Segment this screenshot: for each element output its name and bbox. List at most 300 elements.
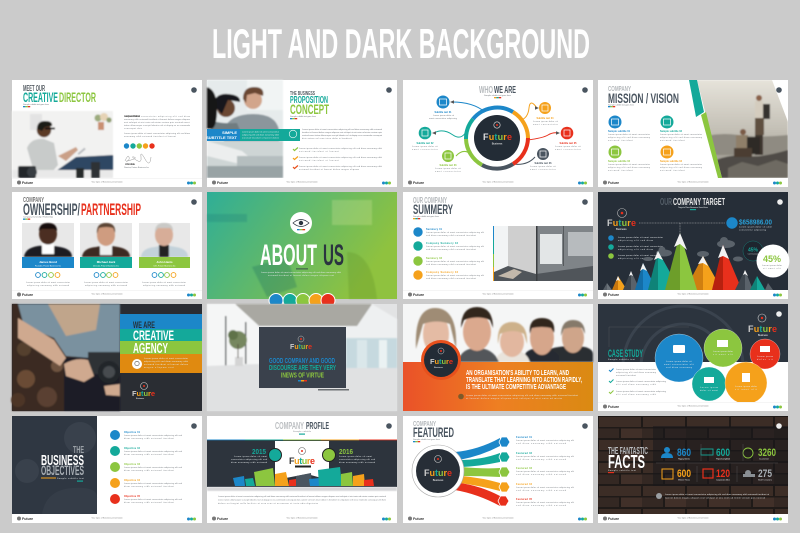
heading: THE [73, 445, 84, 456]
footer [598, 178, 788, 187]
objectives list: Objective 03 [124, 463, 141, 466]
objectives list: diam nonummy nibh euismod tincidunt [124, 469, 174, 472]
panel: company target [598, 192, 790, 299]
stat: 600 teal: 600 [716, 447, 730, 459]
logo [748, 314, 777, 337]
heading: FACTS [608, 452, 645, 472]
heading: PROFILE [306, 421, 329, 432]
color dots [269, 294, 335, 308]
stat: white 45 percent: 45% [763, 254, 781, 264]
footer [207, 514, 397, 523]
footer: Your topic of Business presentation [91, 516, 123, 520]
color bands [120, 314, 202, 373]
panel: ownership partnership [12, 192, 202, 299]
dark gauge header [598, 304, 788, 362]
feature labels: sed diam nonummy nibh euismod [516, 443, 567, 445]
heading: Sample subtitle [293, 430, 312, 433]
node labels: Subtitle text 02 [416, 142, 434, 145]
footer: Future [22, 517, 33, 521]
ribbon end badges [498, 437, 510, 506]
signature: Director, Future Business Inc [124, 166, 150, 169]
icon: badge [777, 199, 783, 205]
four mission items: Lorem ipsum dolor sit amet consectetur [608, 163, 650, 166]
footer: Future [217, 181, 228, 185]
checklist: Lorem ipsum dolor sit amet consectetur adipiscing elit sed diam nonummy nibh [299, 165, 383, 168]
footer: Future [413, 293, 424, 297]
subtitle band: euismod tincidunt ut laoreet dolore [242, 136, 280, 140]
stat: 3260: 3260 [758, 447, 776, 459]
icon: badge [776, 423, 782, 429]
heading [660, 197, 725, 210]
amount [726, 217, 772, 232]
card: James Bond: Founder, Future Business Inc [35, 264, 61, 268]
node labels: Lorem ipsum dolor sit [433, 114, 454, 117]
subtitle band [206, 129, 300, 141]
body text [124, 115, 191, 138]
footer: Your topic of Business presentation [677, 180, 709, 184]
accent stripes [689, 80, 722, 178]
summary items: sed diam nonummy nibh euismod tincidunt [426, 248, 476, 251]
four mission items: Sample subtitle 04 [660, 160, 683, 163]
body text: nonummy nibh euismod tincidunt ut laoreet dolore magna aliquam [124, 118, 190, 121]
caption [656, 493, 769, 500]
bubble icons and text: Lorem ipsum dolor [735, 385, 757, 388]
checklist: euismod tincidunt ut laoreet [299, 150, 339, 153]
subtitle band: adipiscing elit sed diam nonummy nibh [242, 134, 280, 136]
node labels: Lorem ipsum dolor sit [435, 167, 461, 170]
caption: ut laoreet dolore magna aliquam erat volutpat ut wisi enim ad minim [466, 397, 562, 400]
stat: 275: Staff Creators [758, 478, 773, 482]
logo badge [421, 340, 461, 380]
heading: BUSINESS [41, 452, 84, 469]
heading: FEATURED [413, 424, 454, 440]
ribbons [455, 438, 500, 506]
heading: WHO [479, 85, 493, 96]
node labels: Subtitle text 04 [536, 117, 554, 120]
card: Michael Jack [80, 223, 132, 268]
stat: 3260: Customer [759, 458, 769, 460]
arrows [432, 100, 560, 164]
footer: Your topic of Business presentation [91, 180, 123, 184]
heading: COMPANY [275, 421, 304, 432]
stat: 120: 120 [716, 468, 730, 480]
objectives list: Objective 01 [124, 431, 141, 434]
heading [413, 196, 453, 219]
footer: Your topic of Business presentation [286, 516, 318, 520]
signature: John Hanis [125, 163, 136, 166]
objectives list: Objective 02 [124, 447, 141, 450]
checklist: Lorem ipsum dolor sit amet consectetur adipiscing [616, 390, 667, 393]
timeline 2015 [231, 448, 282, 464]
four mission items: adipiscing elit sed diam nonummy [660, 166, 703, 169]
node labels: Subtitle text 03 [439, 164, 457, 167]
stat: 600 orange: Winner Years [678, 478, 691, 482]
stat: 600 orange: 600 [677, 468, 691, 480]
timeline 2015: diam nonummy nibh euismod [231, 462, 268, 464]
footer: Future [22, 181, 33, 185]
ring diagram: Future [483, 132, 512, 142]
panel: who we are [403, 80, 593, 187]
contact icons and text: Lorem ipsum dolor sit amet consectetur [84, 281, 128, 284]
ring diagram: Business [492, 142, 503, 146]
body text: Lorem ipsum dolor sit amet consectetur adipiscing elit sed diam [124, 132, 190, 135]
footer: Your topic of Business presentation [482, 292, 514, 296]
amount: Lorem ipsum dolor sit amet [739, 226, 772, 228]
heading: OUR COMPANY [413, 196, 447, 205]
subtitle band: Lorem ipsum dolor sit amet consectetur [242, 130, 279, 134]
heading: Sample subtitle text goes here [484, 94, 512, 97]
heading: AGENCY [133, 341, 168, 357]
footer [598, 290, 788, 299]
quote box: DISCOURSE ARE THEY VERY [269, 365, 336, 372]
heading: Sample subtitle text [57, 477, 84, 480]
feature labels: Featured 03 [516, 467, 533, 470]
objectives list [110, 430, 183, 504]
summary items: Company Summery 04 [426, 271, 459, 274]
checklist [293, 147, 383, 171]
footer: Your topic of Business presentation [677, 404, 709, 408]
stat: white 45 percent: Lorem ipsum dolor [762, 264, 782, 267]
heading [479, 85, 516, 98]
left list: Lorem ipsum dolor sit amet consectetur [618, 236, 663, 239]
logo: Future [748, 324, 777, 334]
node labels: Lorem ipsum dolor sit [555, 145, 581, 148]
quote: AN ORGANISATION'S ABILITY TO LEARN, AND [466, 370, 569, 377]
footer: Your topic of Business presentation [482, 180, 514, 184]
quote box: GOOD COMPANY AND GOOD [269, 358, 335, 365]
panel: creative agency [11, 304, 202, 411]
amount: $658986.00 [739, 220, 772, 226]
dark overlay [598, 416, 788, 514]
logo [132, 382, 155, 400]
amount: consectetur adipiscing [739, 228, 767, 232]
checklist: adipiscing elit sed diam nonummy [616, 371, 657, 374]
panel: creative director [12, 80, 202, 187]
node labels: Lorem ipsum dolor sit [412, 145, 438, 148]
icon and text: Lorem ipsum dolor sit amet consectetur [144, 357, 188, 360]
feature labels: Lorem ipsum dolor sit amet consectetur adipiscing elit [516, 439, 574, 442]
icons: social row [124, 143, 155, 149]
feature labels: Lorem ipsum dolor sit amet consectetur adipiscing elit [516, 486, 574, 489]
heading: COMPANY [608, 84, 631, 93]
body text: nostrud exerci tation ullamcorper suscipit lobortis nisl ut aliquip ex ea commodo consequat [302, 134, 382, 137]
panel: business objectives [12, 416, 202, 523]
icon: badge [386, 87, 392, 93]
four mission items: Sample subtitle 02 [660, 130, 683, 133]
stat: 860: Happy Clients [678, 458, 691, 460]
stat: dark 45 percent: Lorem ipsum [748, 254, 759, 256]
checklist: elit sed diam nonummy nibh [616, 393, 657, 396]
feature labels: Featured 01 [516, 436, 533, 439]
logo badge: Future [430, 357, 453, 366]
timeline 2016: diam nonummy nibh euismod [339, 462, 376, 464]
summary items: Lorem ipsum dolor sit amet consectetur adipiscing elit [426, 274, 484, 277]
footer [403, 514, 593, 523]
body text: nonummy nibh euismod tincidunt ut laoreet [124, 135, 176, 138]
icon: badge [776, 311, 782, 317]
node labels: amet consectetur [533, 123, 558, 126]
stat: 600 teal [701, 447, 731, 460]
feature labels: Lorem ipsum dolor sit amet consectetur adipiscing elit [516, 455, 574, 458]
contact icons and text: adipiscing nonummy nibh euismod [143, 285, 186, 287]
feature labels: Lorem ipsum dolor sit amet consectetur adipiscing elit [516, 501, 574, 504]
summary items: Lorem ipsum dolor sit amet consectetur adipiscing elit [426, 260, 484, 263]
caption: laoreet dolore magna aliquam erat volutpat ut wisi enim ad minim veniam quis nostrud [665, 496, 766, 500]
logo: Future [132, 389, 155, 398]
checklist: elit sed diam nonummy nibh [616, 383, 657, 386]
heading [608, 446, 648, 473]
four mission items: adipiscing elit sed diam nonummy [608, 136, 651, 139]
footer [598, 402, 788, 411]
heading: Company Ownership / Partnership [23, 216, 54, 218]
heading [133, 320, 174, 357]
footer: Future [413, 517, 424, 521]
divider and text: Lorem ipsum dolor sit amet consectetur adipiscing elit sed diam nonummy nibh [261, 271, 342, 274]
feature labels [516, 436, 574, 507]
divider and text: euismod tincidunt ut laoreet dolore magna aliquam erat [268, 274, 334, 277]
panel: mission vision [598, 80, 788, 187]
summary items [413, 227, 484, 280]
bubble icons and text: dolor sit amet [700, 389, 718, 392]
photo: atrium [207, 304, 397, 411]
mountains [603, 233, 773, 290]
summary items: Summery 03 [426, 257, 443, 260]
stat: 120: Corporate office [716, 478, 731, 482]
summary items: sed diam nonummy nibh euismod tincidunt [426, 234, 476, 237]
caption: Lorem ipsum dolor sit amet consectetur adipiscing elit sed diam nonummy nibh euismod tincidunt [466, 394, 578, 397]
bubble icons and text: Lorem ipsum [757, 355, 773, 358]
bubble icons and text: sit amet elit [713, 353, 733, 356]
four mission items: euismod tincidunt [608, 169, 633, 172]
checklist: euismod tincidunt ut laoreet [299, 159, 339, 162]
heading: THE BUSINESS [290, 91, 315, 97]
heading: COMPANY [23, 197, 44, 204]
icon blocks [233, 467, 374, 486]
stat: 860 [661, 447, 691, 460]
objectives list: Lorem ipsum dolor sit amet consectetur adipiscing elit sed [124, 434, 183, 437]
node labels [412, 111, 581, 173]
card: James Bond [22, 223, 74, 268]
signature [124, 154, 151, 169]
four mission items: euismod tincidunt [608, 139, 633, 142]
four mission items: Sample subtitle 03 [608, 160, 631, 163]
photo: man with tablet [12, 111, 113, 178]
heading: MISSION / VISION [608, 90, 679, 106]
caption: Lorem ipsum dolor sit amet consectetur adipiscing elit sed diam nonummy nibh euismod tincidunt ut [665, 493, 769, 496]
logo circle [412, 445, 464, 497]
footer: Your topic of Business presentation [677, 516, 709, 520]
body text [302, 128, 383, 140]
footer [598, 514, 788, 523]
heading: OBJECTIVES [41, 463, 84, 478]
heading: DIRECTOR [59, 90, 96, 105]
stat: 600 teal: Project Completed [716, 458, 731, 460]
checklist [609, 368, 667, 396]
four mission items: adipiscing elit sed diam nonummy [608, 166, 651, 169]
quote: IS THE ULTIMATE COMPETITIVE ADVANTAGE [466, 384, 566, 391]
node labels: amet consectetur [412, 148, 438, 151]
bubble icons and text: sit amet elit [735, 388, 757, 391]
node labels: Subtitle text 01 [434, 111, 452, 114]
body text: Lorem ipsum dolor sit amet [124, 115, 140, 118]
heading: US [323, 239, 344, 272]
body text: consectetur adipiscing elit sed diam [141, 115, 190, 118]
bubble icons and text: sed diam nonummy [666, 367, 693, 369]
node labels: Lorem ipsum dolor sit [530, 165, 556, 168]
panel: summery [403, 192, 593, 299]
heading [608, 348, 643, 361]
contact icons and text: Lorem ipsum dolor sit amet consectetur [142, 281, 186, 284]
body text: exerci tation ullamcorper suscipit lobortis nisl ut aliquip ex ea commodo consequat duis autem vel eum iriure dolor in hendrerit in vulputate velit esse molestie consequat vel illum [218, 498, 386, 502]
connector [639, 223, 725, 233]
quote box [259, 327, 349, 390]
heading: Sample subtitle text goes here [413, 438, 441, 441]
timeline 2015: consectetur adipiscing elit sed [231, 458, 268, 461]
feature labels: sed diam nonummy nibh euismod [516, 490, 567, 492]
checklist: Lorem ipsum dolor sit amet consectetur adipiscing elit sed diam nonummy nibh [299, 156, 383, 159]
panel: proposition concept [206, 80, 397, 187]
node labels: amet consectetur [530, 168, 556, 171]
contact icons and text [26, 273, 186, 287]
objectives list: Lorem ipsum dolor sit amet consectetur adipiscing elit sed [124, 482, 183, 485]
left list: adipiscing elit sed diam [618, 248, 653, 251]
node labels: Lorem ipsum dolor sit [533, 120, 558, 123]
summary items: sed diam nonummy nibh euismod tincidunt [426, 263, 476, 266]
logo card [275, 441, 329, 480]
stat: 120 [703, 468, 731, 482]
footer: Future [22, 293, 33, 297]
footer: Future [217, 517, 228, 521]
timeline 2016: consectetur adipiscing elit sed [339, 458, 376, 461]
body text: tation ullamcorper suscipit lobortis nisl ut aliquip ex ea commodo [124, 124, 191, 127]
dark photo side [12, 416, 97, 514]
panel: company featured [403, 416, 593, 523]
left list [608, 235, 663, 260]
footer: Future [413, 181, 424, 185]
panel: about us [207, 192, 397, 308]
timeline 2016: Lorem ipsum dolor sit amet [339, 455, 372, 458]
left list: Lorem ipsum dolor sit amet consectetur [618, 245, 663, 248]
body text: consequat duis [124, 127, 143, 130]
quote box: Future [290, 344, 312, 351]
heading: THE FANTASTIC [608, 446, 648, 457]
objectives list: diam nonummy nibh euismod tincidunt [124, 437, 174, 440]
heading: COMPANY [413, 421, 436, 428]
heading: SUMMERY [413, 201, 453, 217]
heading: Sample subtitle text goes here [608, 104, 635, 107]
objectives list: Objective 04 [124, 479, 141, 482]
objectives list: diam nonummy nibh euismod tincidunt [124, 453, 174, 456]
footer: Future [608, 517, 619, 521]
quote box: INEWS OF VIRTUE [281, 372, 324, 380]
feature labels: Lorem ipsum dolor sit amet consectetur adipiscing elit [516, 470, 574, 473]
heading: Sample subtitle text [608, 358, 635, 361]
four mission items: Sample subtitle 01 [608, 130, 631, 133]
footer [12, 178, 202, 187]
photo: business meeting [207, 80, 283, 178]
panel: good company quote [207, 304, 397, 411]
footer: Future [608, 405, 619, 409]
summary items: sed diam nonummy nibh euismod tincidunt [426, 277, 476, 280]
feature labels: sed diam nonummy nibh euismod [516, 474, 567, 476]
left list: Lorem ipsum dolor sit amet consectetur [618, 254, 663, 257]
logo card: Future [289, 456, 315, 466]
photo color edge [493, 226, 494, 281]
stat: 860: 860 [677, 447, 691, 459]
contact icons and text: adipiscing nonummy nibh euismod [85, 285, 128, 287]
caption [458, 394, 578, 400]
ring diagram [466, 108, 528, 169]
logo circle: Future [424, 468, 452, 478]
stat: dark 45 percent: 45% [748, 248, 759, 254]
icon and text: adipiscing elit sed diam nonummy nibh [144, 360, 189, 363]
bubble icons and text [664, 340, 773, 392]
timeline 2016: 2016 [339, 449, 353, 456]
left list: adipiscing elit sed diam [618, 239, 653, 242]
body text [218, 495, 387, 505]
timeline 2015: Lorem ipsum dolor sit amet [234, 455, 267, 458]
heading: CREATIVE [23, 90, 58, 105]
quote [466, 370, 582, 391]
logo: Future [607, 218, 636, 228]
bubbles [655, 329, 780, 404]
footer [403, 178, 593, 187]
footer [12, 290, 202, 299]
divider and text [261, 268, 342, 277]
node icons [419, 96, 573, 162]
footer: Future [608, 293, 619, 297]
four mission items: Lorem ipsum dolor sit amet consectetur [660, 133, 702, 136]
orange band [403, 362, 593, 411]
heading [290, 91, 329, 119]
body text: Lorem ipsum dolor sit amet consectetur adipiscing elit sed diam nonummy nibh euismod [302, 128, 383, 131]
feature labels: Featured 02 [516, 452, 533, 455]
objectives list: Objective 05 [124, 495, 141, 498]
heading: WE ARE [494, 85, 516, 96]
heading: PARTNERSHIP [81, 201, 141, 219]
heading: OWNERSHIP/ [23, 201, 80, 219]
photo: five faces [416, 307, 593, 362]
contact icons and text: adipiscing nonummy nibh euismod [27, 285, 70, 287]
four mission items: Lorem ipsum dolor sit amet consectetur [608, 133, 650, 136]
stat: 275: 275 [758, 468, 772, 480]
four mission items: euismod tincidunt [660, 139, 685, 142]
icon: badge [191, 199, 197, 205]
icon: badge [582, 199, 588, 205]
objectives list: Lorem ipsum dolor sit amet consectetur adipiscing elit sed [124, 450, 183, 453]
subtitle band: SIMPLE [222, 130, 237, 135]
node labels: amet consectetur adipiscing [429, 117, 458, 120]
checklist: euismod tincidunt ut laoreet dolore magna aliquam [299, 168, 359, 171]
stat: 600 orange [662, 468, 691, 482]
heading: COMPANY TARGET [673, 197, 725, 208]
logo: Business [136, 398, 144, 400]
office backdrop [207, 200, 377, 299]
stat: 3260 [743, 447, 776, 460]
card: James Bond: James Bond [39, 260, 57, 264]
bubble icons and text: Lorem ipsum dolor [713, 350, 733, 353]
card: John Hanis: John Hanis [156, 260, 173, 264]
logo circle: Business [433, 478, 444, 482]
node labels: amet consectetur [555, 148, 581, 151]
bubble icons and text: Lorem ipsum dolor sit [666, 360, 692, 363]
heading: WE ARE [133, 320, 155, 330]
objectives list: Lorem ipsum dolor sit amet consectetur adipiscing elit sed [124, 498, 183, 501]
stat: 275 [743, 468, 773, 482]
photo: hikers [688, 80, 788, 178]
stat: white 45 percent: sit amet elit [763, 267, 781, 270]
footer [207, 178, 397, 187]
